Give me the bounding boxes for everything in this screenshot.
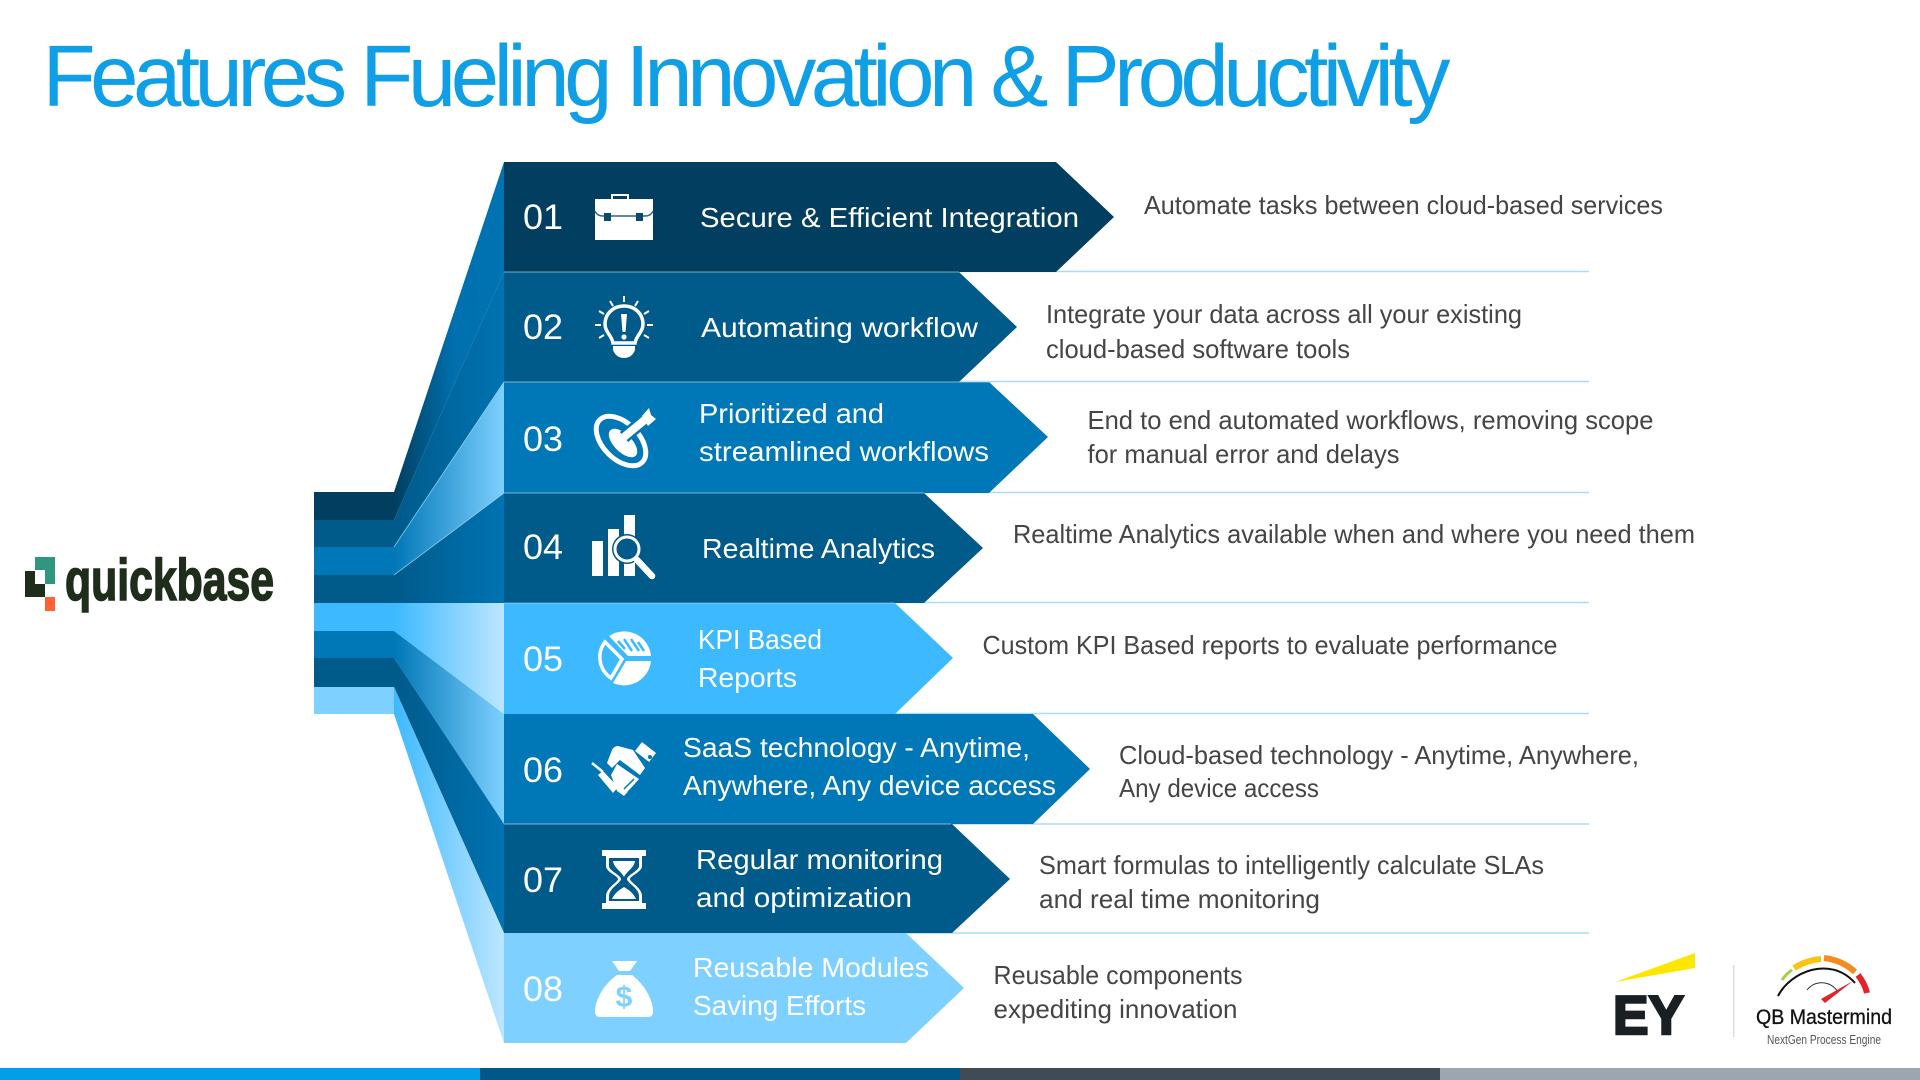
- row 02: [504, 271, 1017, 382]
- QB Mastermind logo: [1756, 958, 1892, 1047]
- row 02: 02: [523, 308, 563, 347]
- description 03: [1088, 405, 1654, 469]
- description 06: Cloud-based technology - Anytime, Anywhere,: [1119, 740, 1639, 770]
- icon: handshake: [592, 742, 656, 796]
- quickbase logo: [25, 548, 274, 613]
- icon: pie chart: [600, 631, 651, 685]
- QB Mastermind logo: QB Mastermind: [1756, 1006, 1892, 1029]
- row 08: Saving Efforts: [693, 990, 866, 1021]
- row 06: [504, 714, 1090, 824]
- row 01: Secure & Efficient Integration: [700, 202, 1079, 233]
- icon: light bulb: [595, 296, 653, 358]
- row 08: Reusable Modules: [693, 952, 929, 983]
- icon: bar chart with magnifier: [592, 515, 652, 576]
- row 08: 08: [523, 970, 563, 1009]
- EY logo: EY: [1613, 984, 1684, 1046]
- QB Mastermind logo: NextGen Process Engine: [1767, 1032, 1881, 1047]
- row 07: Regular monitoring: [696, 844, 943, 875]
- row 04: [504, 492, 983, 603]
- row 05: [504, 602, 953, 714]
- description 07: [1039, 850, 1544, 914]
- row 04: Realtime Analytics: [702, 533, 935, 564]
- EY logo: [1613, 953, 1695, 1046]
- row 05: 05: [523, 640, 563, 679]
- description 04: Realtime Analytics available when and where you need them: [1013, 519, 1695, 549]
- row 03: [504, 381, 1048, 493]
- icon: money bag: $: [616, 981, 633, 1014]
- row 06: Anywhere, Any device access: [683, 770, 1056, 801]
- row 02: Automating workflow: [701, 312, 979, 343]
- row 04: 04: [523, 528, 563, 567]
- description 02: [1046, 299, 1522, 364]
- title: Features Fueling Innovation & Productivity: [42, 28, 1451, 125]
- row 08: [504, 933, 964, 1043]
- description 08: Reusable components: [994, 960, 1242, 990]
- logo divider: [1733, 965, 1734, 1037]
- row 03: 03: [523, 420, 563, 459]
- row 06: SaaS technology - Anytime,: [683, 732, 1030, 763]
- icon: target with dart: [587, 407, 656, 475]
- row 06: 06: [523, 751, 563, 790]
- description 02: cloud-based software tools: [1046, 334, 1350, 364]
- icon: money bag: [595, 961, 653, 1017]
- funnel strips on the left: [314, 492, 394, 714]
- row 01: 01: [523, 198, 563, 237]
- row 05: KPI Based: [698, 624, 822, 655]
- row 03: Prioritized and: [699, 398, 884, 429]
- connecting ribbons: [394, 162, 504, 1043]
- row 03: streamlined workflows: [699, 436, 989, 467]
- description 06: [1119, 740, 1639, 803]
- gauge: [1778, 958, 1867, 1003]
- separator lines to the right: [890, 272, 1589, 933]
- description 08: [994, 960, 1242, 1024]
- icon: briefcase: [595, 195, 653, 240]
- row 07: and optimization: [696, 882, 912, 913]
- description 06: Any device access: [1119, 773, 1319, 803]
- row 05: Reports: [698, 662, 797, 693]
- description 05: Custom KPI Based reports to evaluate performance: [982, 630, 1558, 660]
- icon: hourglass: [602, 850, 646, 909]
- row 07: 07: [523, 861, 563, 900]
- description 07: and real time monitoring: [1039, 884, 1320, 914]
- description 07: Smart formulas to intelligently calculate SLAs: [1039, 850, 1544, 880]
- description 08: expediting innovation: [994, 994, 1238, 1024]
- row 07: [504, 823, 1010, 933]
- footer colour bar: [0, 1068, 1920, 1080]
- description 03: End to end automated workflows, removing scope: [1088, 405, 1654, 435]
- description 03: for manual error and delays: [1088, 439, 1400, 469]
- quickbase logo: quickbase: [65, 548, 274, 613]
- row 01: [504, 162, 1114, 272]
- description 02: Integrate your data across all your existing: [1046, 299, 1522, 329]
- description 01: Automate tasks between cloud-based services: [1144, 190, 1663, 220]
